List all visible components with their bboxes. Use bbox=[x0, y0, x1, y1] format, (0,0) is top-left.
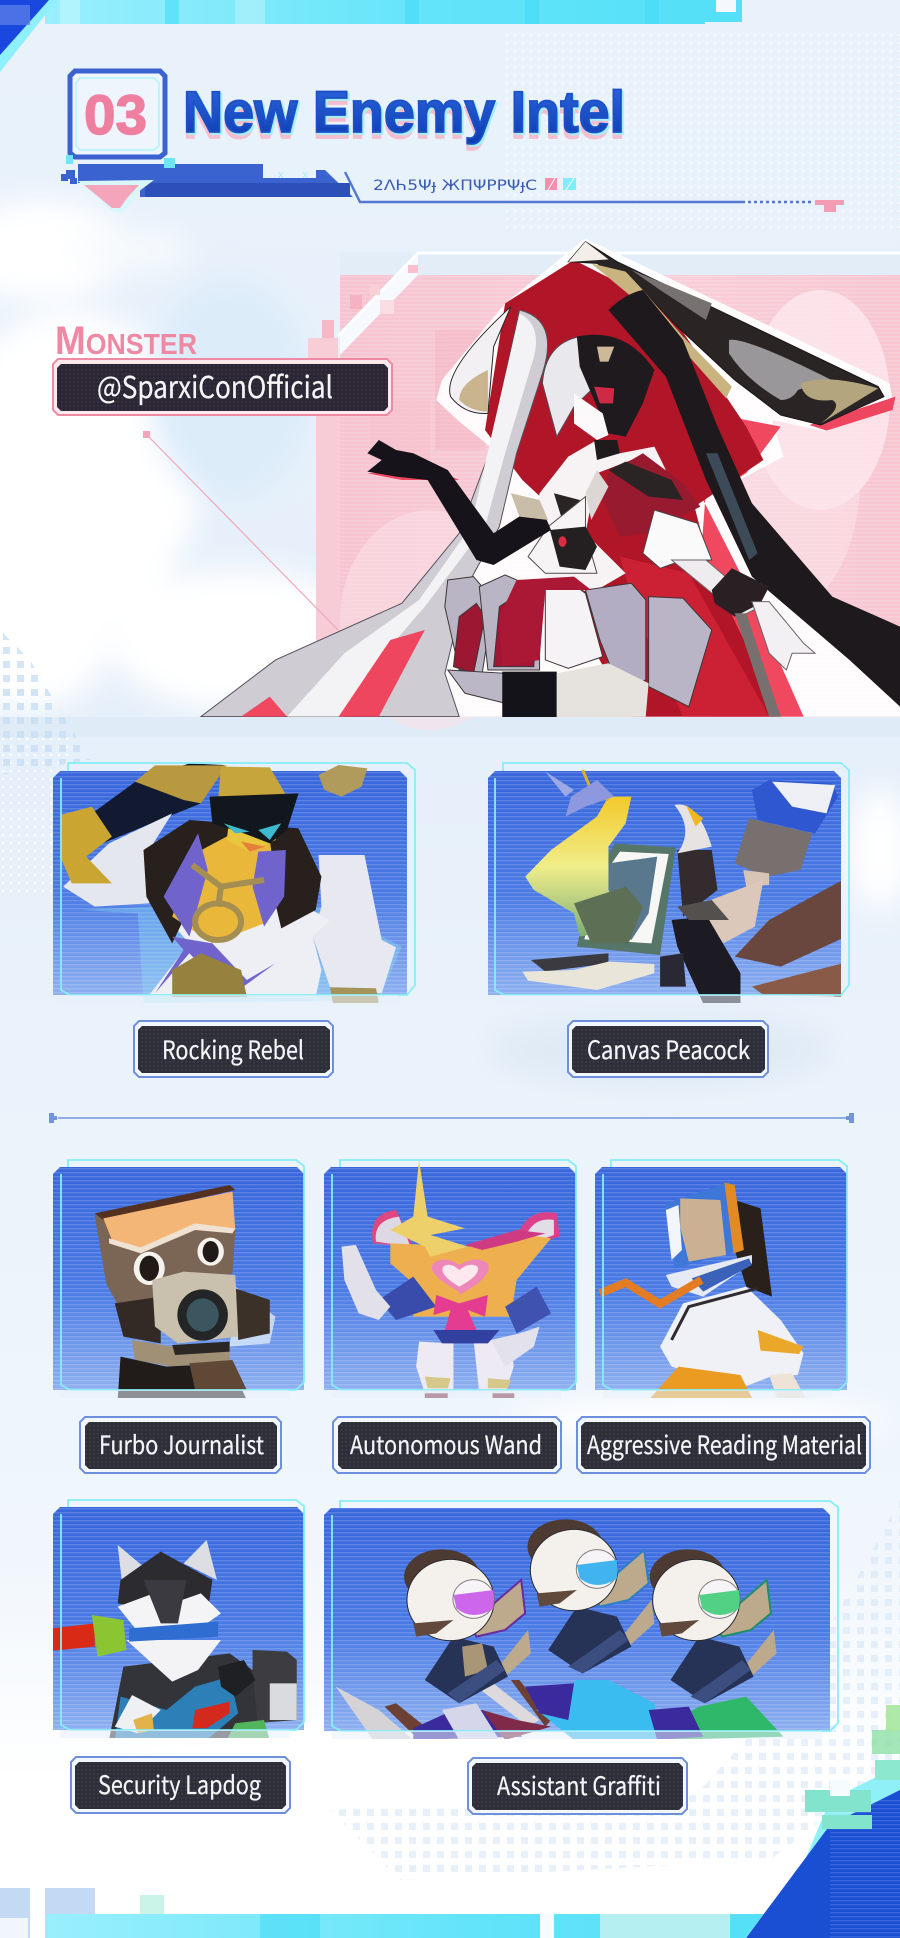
hood bbox=[568, 242, 884, 425]
blue bird bbox=[525, 1519, 660, 1740]
frame bbox=[332, 1501, 838, 1731]
label: Security Lapdog: Security Lapdog bbox=[98, 1766, 261, 1802]
label: Autonomous Wand: Autonomous Wand bbox=[350, 1426, 542, 1462]
peacock figure bbox=[522, 770, 843, 1003]
bottom cyan pixel band bbox=[0, 1888, 765, 1938]
title: New Enemy Intel bbox=[183, 80, 625, 145]
header end marker bbox=[815, 200, 844, 212]
frame bbox=[61, 1500, 304, 1730]
head bbox=[542, 337, 591, 437]
label: Autonomous Wand bbox=[333, 1417, 561, 1473]
label: Assistant Graffiti bbox=[468, 1758, 687, 1814]
puff sleeve and right arm bbox=[643, 510, 712, 568]
label: Aggressive Reading Material bbox=[577, 1417, 870, 1473]
green bird bbox=[649, 1549, 784, 1740]
bottom-right blue corner bbox=[745, 1705, 900, 1938]
pink hero panel bbox=[308, 252, 900, 730]
label: Security Lapdog bbox=[71, 1757, 290, 1813]
label: Canvas Peacock: Canvas Peacock bbox=[587, 1031, 750, 1067]
card: Aggressive Reading Material bbox=[595, 1160, 847, 1400]
wand figure bbox=[342, 1160, 560, 1400]
card: Assistant Graffiti bbox=[324, 1501, 838, 1740]
section number badge bbox=[70, 71, 165, 157]
header ribbon bbox=[61, 155, 812, 212]
header ribbon: xx bbox=[278, 169, 308, 181]
top cyan pixel band bbox=[45, 0, 742, 24]
monster heading: MONSTER bbox=[55, 319, 197, 363]
hero character bbox=[201, 238, 900, 718]
frame bbox=[495, 763, 849, 995]
white feathers bbox=[336, 1680, 550, 1739]
card: Autonomous Wand bbox=[324, 1160, 576, 1400]
label: Furbo Journalist: Furbo Journalist bbox=[99, 1426, 264, 1462]
purple bird bbox=[404, 1549, 551, 1740]
frame bbox=[603, 1160, 847, 1390]
frame bbox=[332, 1160, 576, 1390]
legs bbox=[502, 672, 557, 718]
long black ribbons bbox=[608, 290, 900, 707]
skirt petals bbox=[445, 575, 712, 707]
label: Canvas Peacock bbox=[568, 1021, 768, 1077]
frame bbox=[61, 763, 415, 995]
reader figure bbox=[600, 1182, 806, 1400]
label: Rocking Rebel bbox=[134, 1021, 333, 1077]
cipher subtitle: 2ΛҺ5Ψɟ ЖПΨPPΨɟC bbox=[373, 178, 537, 194]
card: Security Lapdog bbox=[53, 1500, 304, 1740]
label: Furbo Journalist bbox=[80, 1417, 281, 1473]
divider bbox=[49, 1113, 854, 1123]
furbo figure bbox=[95, 1185, 276, 1400]
cipher subtitle bbox=[373, 178, 576, 194]
cape lining bbox=[485, 260, 781, 717]
card: Rocking Rebel bbox=[53, 763, 415, 1003]
frame bbox=[61, 1160, 304, 1390]
leader line bbox=[143, 431, 338, 630]
bunny doll bbox=[528, 497, 597, 573]
label: Assistant Graffiti: Assistant Graffiti bbox=[497, 1767, 661, 1803]
lapdog figure bbox=[53, 1540, 297, 1740]
badge number: 03 bbox=[84, 83, 147, 146]
monster name plate bbox=[53, 359, 392, 415]
plate text: @SparxiConOfficial bbox=[97, 363, 333, 407]
top-left blue corner bbox=[0, 0, 57, 72]
card: Canvas Peacock bbox=[488, 763, 849, 1003]
left ear bbox=[450, 307, 511, 413]
character glow and shadow bbox=[368, 238, 900, 717]
card: Furbo Journalist bbox=[53, 1160, 304, 1400]
torso bbox=[534, 440, 666, 593]
white ponytail bbox=[201, 310, 548, 717]
black glove arm bbox=[367, 440, 551, 565]
label: Rocking Rebel: Rocking Rebel bbox=[162, 1031, 304, 1067]
title: New Enemy Intel bbox=[183, 86, 625, 151]
title: New Enemy Intel bbox=[185, 82, 627, 147]
rebel figure bbox=[60, 763, 402, 1003]
